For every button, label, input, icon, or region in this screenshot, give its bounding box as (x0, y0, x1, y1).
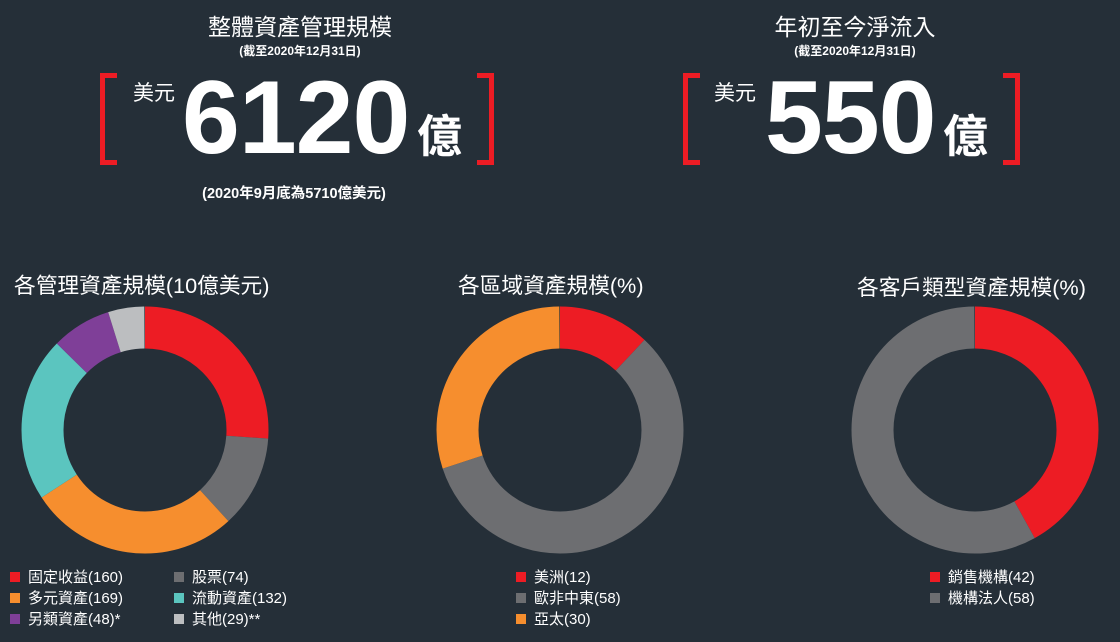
legend 3 (930, 569, 1035, 607)
bracket left 2 (683, 73, 700, 165)
legend 1 (10, 569, 287, 628)
bracket left 1 (100, 73, 117, 165)
legend 1: 其他(29)** (192, 611, 260, 628)
bracket right 1 (477, 73, 494, 165)
legend 3: 機構法人(58) (948, 590, 1035, 607)
bracket right 2 (1003, 73, 1020, 165)
legend 2: 歐非中東(58) (534, 590, 621, 607)
donut 2: by region (458, 328, 662, 532)
title: total AUM: 整體資產管理規模 (208, 14, 392, 40)
legend 2 (516, 569, 621, 628)
unit 億 1: 億 (417, 111, 462, 162)
legend 2: 美洲(12) (534, 569, 591, 586)
chart title 2: 各區域資產規模(%) (458, 273, 644, 298)
title: net inflow: 年初至今淨流入 (774, 14, 936, 40)
subtitle: date left: (截至2020年12月31日) (239, 44, 361, 58)
donut 3: by client type (872, 328, 1078, 532)
big number 550: 550 (765, 60, 936, 176)
big number 6120: 6120 (182, 60, 409, 176)
legend 1: 股票(74) (192, 569, 249, 586)
legend 1: 固定收益(160) (28, 569, 123, 586)
chart title 3: 各客戶類型資產規模(%) (857, 275, 1086, 300)
unit 億 2: 億 (943, 111, 988, 162)
currency label 1: 美元 (133, 82, 175, 105)
chart title 1: 各管理資產規模(10億美元) (14, 273, 269, 298)
legend 1: 另類資產(48)* (28, 611, 121, 628)
legend 2: 亞太(30) (534, 611, 591, 628)
subtitle: date right: (截至2020年12月31日) (794, 44, 916, 58)
legend 3: 銷售機構(42) (948, 569, 1035, 586)
legend 1: 多元資產(169) (28, 590, 123, 607)
donut 1: AUM by asset class (42, 328, 248, 532)
currency label 2: 美元 (714, 82, 756, 105)
legend 1: 流動資產(132) (192, 590, 287, 607)
note: September: (2020年9月底為5710億美元) (202, 186, 386, 202)
